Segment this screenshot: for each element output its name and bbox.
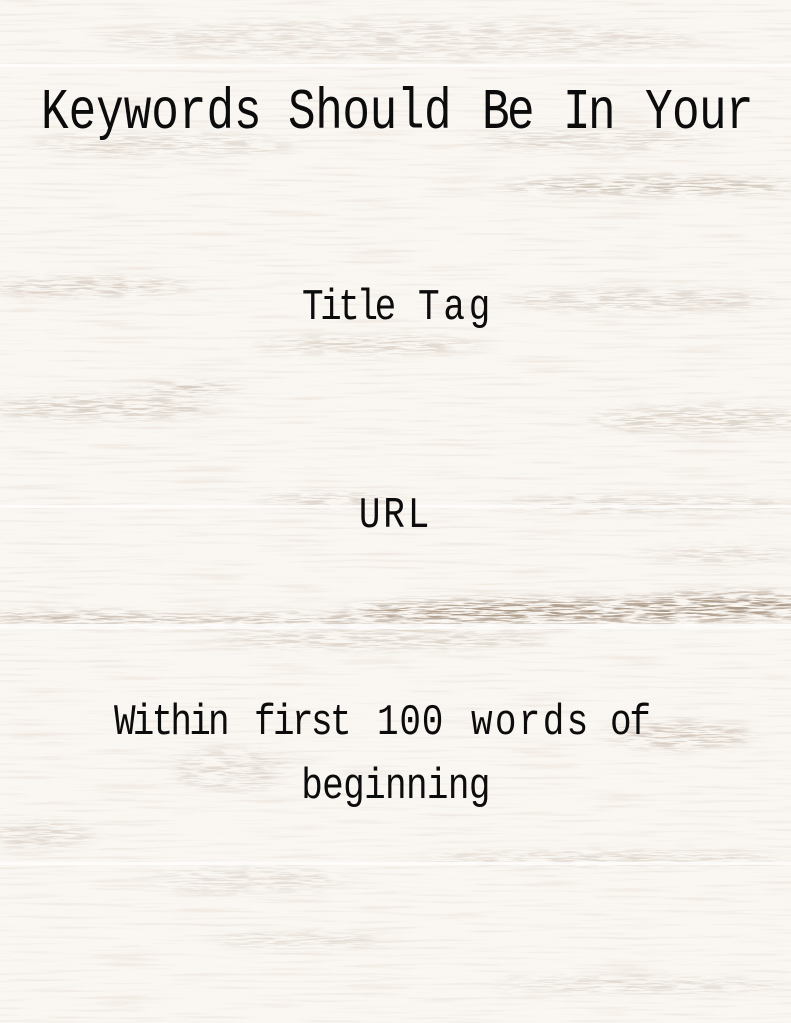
text: Title Tag: Tag — [418, 283, 494, 332]
text: Within first 100 words of: Within — [114, 698, 227, 747]
text: Title Tag — [302, 283, 494, 332]
text: Within first 100 words of: words — [471, 698, 591, 747]
text: Title Tag: Title — [302, 283, 393, 332]
text: Within first 100 words of — [114, 698, 649, 747]
title: Be — [482, 80, 532, 146]
title: Your — [645, 80, 753, 146]
text: beginning: beginning — [301, 762, 490, 811]
text: Within first 100 words of: first — [254, 698, 349, 747]
title: In — [563, 80, 613, 146]
title: Keywords — [41, 80, 262, 146]
text: Within first 100 words of: of — [610, 698, 649, 747]
title — [41, 80, 753, 146]
text: URL: URL — [359, 491, 432, 540]
text: Within first 100 words of: 100 — [377, 698, 444, 747]
title: Should — [288, 80, 451, 146]
